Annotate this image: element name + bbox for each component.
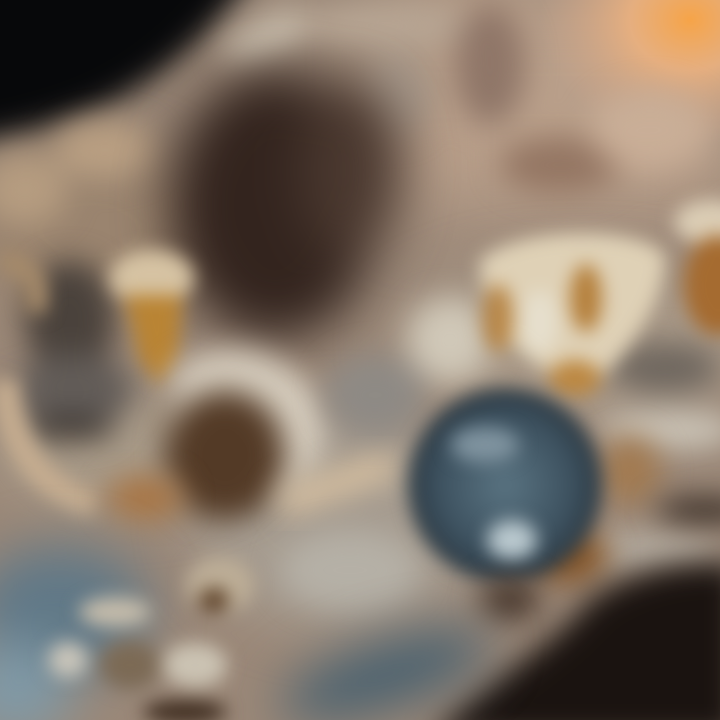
central dark brown form (170, 70, 400, 340)
blue-grey lower-left drape (0, 545, 500, 720)
amber crystal (110, 250, 194, 385)
pale cloth centre (280, 298, 720, 610)
small pebbles cluster (48, 557, 254, 720)
crown-shaped crystal (480, 233, 665, 396)
left dark vessel (15, 260, 135, 440)
blue sphere (408, 388, 660, 583)
pale upper highlights (0, 0, 710, 226)
right amber orb (674, 200, 720, 335)
left amber arc (0, 262, 95, 505)
dark top-left corner (0, 0, 260, 145)
dark lower-right foreground (430, 498, 720, 720)
large pale rock (107, 350, 395, 520)
orange light glow (540, 0, 720, 145)
